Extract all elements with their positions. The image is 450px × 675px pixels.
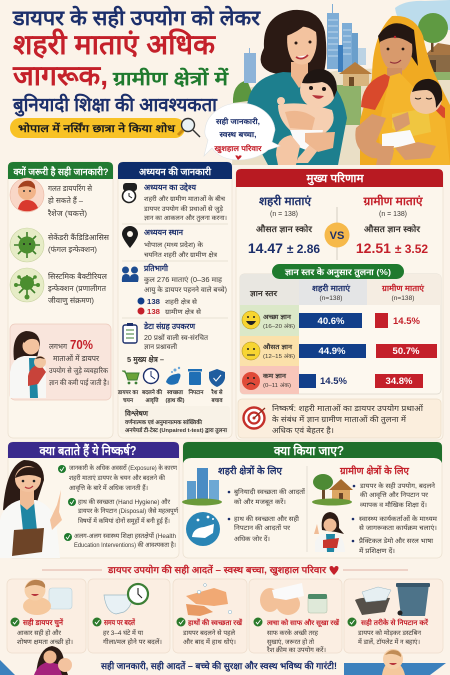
comparison table: ज्ञान स्तर — [249, 289, 278, 298]
text: rashes: गलत डायपरिंग से — [48, 184, 93, 193]
text: 70 percent: उपयोग से जुड़े व्यवहारिक — [49, 366, 108, 375]
text: objective: शहरी और ग्रामीण माताओं के बीच — [144, 195, 226, 203]
finding 2 — [68, 498, 179, 526]
icon: clipboard — [123, 323, 137, 343]
comparison pill heading: ज्ञान स्तर के अनुसार तुलना (%) — [284, 267, 391, 278]
icon: city — [182, 468, 222, 506]
text: area labels: स्वच्छता — [166, 390, 184, 396]
text: fungal infection: (फंगल इन्फेक्शन) — [48, 245, 97, 254]
row: low knowledge: (0–11 अंक) — [263, 382, 291, 389]
text: urban actions: बुनियादी स्वच्छता की आदतों — [234, 488, 305, 496]
title: जागरूक, — [12, 60, 108, 91]
finding 2: डायपर के निपटान (Disposal) जैसे महत्वपूर्ण — [77, 507, 179, 515]
text: area labels: डायपर का — [117, 390, 139, 396]
text: rural actions: से जागरूकता कार्यक्रम चलाएं। — [359, 524, 437, 532]
row: low knowledge: 14.5% — [320, 376, 347, 387]
comparison table — [240, 274, 441, 394]
text: analysis: अनपेयर्ड टी-टेस्ट (Unpaired t-test) द्वारा तुलना — [125, 426, 228, 434]
row: good knowledge: 14.5% — [393, 316, 420, 327]
card: proper disposal: डायपर को मोड़कर डस्टबिन — [357, 629, 421, 637]
icon: handwash — [186, 512, 220, 546]
icon: shield — [209, 369, 225, 387]
text: study location: भोपाल (मध्य प्रदेश) के — [144, 241, 204, 249]
row: good knowledge: (16–20 अंक) — [263, 323, 295, 330]
text: rural actions: व्यापक व मौखिक शिक्षा दें। — [360, 501, 427, 509]
icon: objective clock — [122, 183, 137, 202]
rural score — [356, 194, 428, 256]
text: 70 percent — [49, 338, 109, 387]
rural baby — [392, 108, 431, 138]
callout: speech bubble: सही जानकारी, — [215, 117, 260, 126]
finding 1: शहरी माताएं डायपर के चयन और बदलने की — [69, 474, 165, 482]
illustration: baby and diaper — [23, 580, 72, 615]
text: 70 percent: 70% — [70, 338, 93, 352]
text: bacterial infection — [48, 272, 108, 306]
card: hand hygiene — [173, 579, 247, 653]
panel heading: अध्ययन की जानकारी — [139, 166, 212, 178]
conclusion callout: के संबंध में ज्ञान ग्रामीण माताओं की तुलना में — [272, 415, 406, 425]
card: change on time: समय पर बदलें — [103, 618, 136, 627]
illustration: baby bottom and cream — [260, 583, 327, 615]
urban score: (n = 138) — [270, 211, 298, 218]
illustration: urban and rural mothers — [232, 0, 450, 165]
comparison table: (n=138) — [392, 295, 414, 302]
icon: fungus — [10, 228, 44, 262]
text: fungal infection — [48, 233, 110, 254]
panel heading: क्यों जरूरी है सही जानकारी? — [13, 166, 109, 178]
icon: magnifier — [178, 118, 200, 137]
conclusion callout: अधिक एवं बेहतर है। — [272, 426, 334, 435]
card: keep skin clean: सुखाएं, जरूरत हो तो — [267, 638, 314, 646]
VS badge — [324, 222, 350, 248]
card: proper disposal — [344, 579, 443, 653]
text: area labels: आवृत्ति — [146, 396, 160, 404]
text: rural actions: की आवृत्ति और निपटान पर — [360, 491, 428, 499]
urban mother — [247, 10, 347, 165]
card: hand hygiene: और बाद में हाथ धोएं। — [183, 638, 236, 646]
panel: study information — [117, 162, 232, 438]
panel heading: क्या किया जाए? — [273, 443, 344, 458]
text: participants: प्रतिभागी — [143, 263, 169, 273]
callout: speech bubble: खुशहाल परिवार — [213, 144, 263, 154]
card: change on time: गीला/मल होने पर बदलें। — [103, 638, 162, 646]
text: rural actions: प्रैक्टिकल डेमो और सरल भाषा — [359, 537, 433, 545]
icon: hand washing — [166, 367, 180, 385]
panel heading — [183, 442, 442, 463]
icon: location pin — [122, 226, 138, 248]
text: objective: डायपर उपयोग की प्रथाओं से जुड़े — [143, 205, 223, 213]
text: rural actions — [352, 482, 438, 555]
text: area labels — [117, 388, 223, 404]
title: शहरी माताएं अधिक — [13, 28, 217, 60]
text: data tool: 20 प्रश्नों वाली स्व-संरचित — [144, 333, 209, 342]
finding 2: हाथ की स्वच्छता (Hand Hygiene) और — [78, 498, 170, 506]
finding 3: अलग-अलग स्वास्थ्य शिक्षा हस्तक्षेपों (Health — [74, 532, 176, 540]
urban score: शहरी माताएं — [259, 194, 312, 208]
finding 2: विषयों में कमियां दोनों समूहों में बनी हुई हैं। — [78, 517, 170, 526]
panel heading — [236, 169, 443, 187]
card: right diaper — [7, 579, 86, 653]
text: data tool: ज्ञान प्रश्नावली — [144, 342, 177, 351]
text: rashes: रैशेज (चकत्ते) — [47, 209, 87, 218]
rural mother — [355, 16, 450, 165]
text: rural actions: स्वास्थ्य कार्यकर्ताओं के माध्यम — [359, 515, 438, 523]
card: keep skin clean: साफ करके अच्छी तरह — [267, 629, 318, 637]
panel heading: क्या बताते हैं ये निष्कर्ष? — [39, 443, 136, 458]
text: participants — [138, 263, 227, 316]
illustration: diaper and clock — [104, 584, 148, 614]
panel heading — [8, 162, 113, 179]
title: ग्रामीण क्षेत्रों में — [112, 67, 229, 90]
footer — [0, 646, 446, 675]
callout: speech bubble: स्वस्थ बच्चा, — [218, 130, 256, 139]
card: change on time — [88, 579, 170, 653]
text: urban actions — [228, 488, 305, 543]
icon: health worker — [314, 512, 345, 552]
text: 70 percent: ज्ञान की कमी पाई जाती है। — [49, 378, 109, 387]
icon: shopping cart — [122, 371, 139, 384]
heading: correct diaper habits — [42, 564, 408, 576]
card: right diaper: आकार सही हो और — [17, 629, 61, 637]
text: objective — [143, 182, 227, 222]
text: analysis — [120, 406, 230, 434]
text: analysis: वर्णनात्मक एवं अनुमानात्मक सांख्यिकी — [124, 418, 203, 426]
icon: baby rash — [10, 178, 44, 212]
text: rural actions: डायपर के सही उपयोग, बदलने — [359, 482, 435, 490]
comparison table: शहरी माताएं — [312, 283, 351, 293]
icon: tree and hut — [312, 474, 353, 506]
text: 70 percent: माताओं में डायपर — [53, 354, 100, 363]
icon: dustbin — [188, 369, 202, 385]
title — [12, 5, 261, 117]
row: average knowledge: 44.9% — [319, 346, 346, 357]
card: right diaper: शोषण क्षमता अच्छी हो। — [17, 638, 73, 646]
text: objective: अध्ययन का उद्देश्य — [144, 182, 196, 192]
urban score — [248, 194, 320, 256]
text: area labels: चयन — [122, 398, 134, 404]
icon: nurse with baby — [10, 331, 46, 398]
footer: सही जानकारी, सही आदतें – बच्चे की सुरक्षा और स्वस्थ भविष्य की गारंटी! — [100, 660, 337, 672]
text: area labels: बदलने की — [141, 388, 163, 396]
subheading: urban: शहरी क्षेत्रों के लिए — [218, 465, 283, 477]
row: average knowledge: औसत ज्ञान — [263, 343, 293, 351]
text: bacterial infection: जीवाणु संक्रमण) — [48, 296, 94, 306]
title: बुनियादी शिक्षा की आवश्यकता — [12, 93, 218, 117]
urban baby — [278, 103, 334, 135]
row: good knowledge — [240, 305, 420, 336]
text: 70 percent: लगभग — [49, 342, 68, 351]
rural score: 12.51 ± 3.52 — [356, 240, 428, 256]
row: average knowledge: 50.7% — [393, 346, 420, 357]
card: proper disposal: में डालें, टॉयलेट में न बहाएं। — [358, 638, 420, 646]
panel: what findings tell us — [0, 442, 179, 558]
row: average knowledge: (12–15 अंक) — [263, 353, 295, 360]
text: study location — [144, 228, 217, 259]
conclusion callout: निष्कर्ष: शहरी माताओं का डायपर उपयोग प्रथाओं — [272, 404, 424, 413]
text: participants: ग्रामीण क्षेत्र से — [165, 308, 202, 316]
panel: why correct information matters — [8, 162, 113, 438]
urban score: 14.47 ± 2.86 — [248, 240, 320, 256]
text: participants: 138 — [147, 309, 160, 316]
subtitle pill: भोपाल में नर्सिंग छात्रा ने किया शोध — [18, 122, 176, 135]
text: objective: ज्ञान का आकलन और तुलना करना। — [144, 214, 227, 222]
panel heading: मुख्य परिणाम — [305, 171, 364, 186]
VS badge: VS — [330, 230, 344, 242]
text: rashes — [47, 184, 93, 218]
card: hand hygiene: डायपर बदलने से पहले — [182, 629, 236, 637]
text: participants: आयु के डायपर पहनने वाले बच्चे) — [144, 285, 227, 294]
text: area labels: निपटान — [188, 388, 204, 396]
finding 3: Education Interventions) की आवश्यकता है। — [74, 541, 176, 549]
subtitle pill — [10, 118, 185, 138]
text: bacterial infection: इन्फेक्शन (प्रणालीगत — [48, 284, 107, 293]
text: participants: 138 — [147, 299, 160, 306]
callout: speech bubble — [204, 103, 280, 160]
subheading: rural: ग्रामीण क्षेत्रों के लिए — [339, 465, 410, 477]
card: keep skin clean: त्वचा को साफ और सूखा रखें — [266, 618, 340, 628]
panel heading — [8, 442, 179, 458]
card: proper disposal: सही तरीके से निपटान करें — [360, 618, 429, 627]
text: fungal infection: सेकेंडरी कैंडिडिआसिस — [48, 233, 110, 242]
icon: participants — [122, 266, 139, 282]
card: hand hygiene: हाथों की स्वच्छता रखें — [187, 618, 243, 627]
illustration: baby — [382, 649, 405, 675]
card: change on time: हर 3–4 घंटे में या — [103, 629, 143, 637]
text: rashes: हो सकते हैं – — [48, 196, 84, 205]
row: low knowledge: 34.8% — [386, 376, 413, 387]
row: low knowledge: कम ज्ञान — [262, 373, 287, 380]
conclusion callout — [238, 399, 441, 438]
panel heading — [118, 162, 232, 179]
illustration: doctor — [0, 460, 62, 558]
comparison table: ग्रामीण माताएं — [381, 283, 425, 293]
title: डायपर के सही उपयोग को लेकर — [12, 5, 261, 30]
row: good knowledge: अच्छा ज्ञान — [263, 314, 292, 321]
sky and background scenery — [232, 0, 450, 165]
icon: bacteria — [10, 268, 44, 302]
text: study location: चयनित शहरी और ग्रामीण क्षेत्र — [144, 251, 217, 259]
row: average knowledge — [240, 336, 437, 366]
heading: correct diaper habits: डायपर उपयोग की सही आदतें – स्वस्थ बच्चा, खुशहाल परिवार — [107, 564, 327, 576]
finding 1 — [58, 464, 177, 492]
row: low knowledge — [240, 366, 423, 394]
rural score: (n = 138) — [379, 211, 407, 218]
card: keep skin clean — [249, 579, 342, 654]
text: area labels: रैश से — [211, 388, 223, 396]
text: analysis: विश्लेषण — [124, 409, 149, 418]
rural score: ग्रामीण माताएं — [362, 194, 423, 208]
callout: 70 percent — [10, 324, 111, 400]
text: urban actions: को और मजबूत करें। — [234, 498, 286, 506]
panel: what should be done — [182, 442, 442, 558]
text: urban actions: हाथ की स्वच्छता और सही — [234, 515, 299, 523]
comparison pill heading — [272, 264, 404, 279]
text: participants: शहरी क्षेत्र से — [165, 298, 198, 306]
text: rural actions: में प्रशिक्षण दें। — [359, 547, 395, 555]
card: right diaper: सही डायपर चुनें — [22, 618, 64, 628]
text: area labels: (हाथ की) — [166, 396, 185, 404]
finding 3 — [64, 532, 176, 549]
panel: main results — [236, 169, 443, 440]
text: study location: अध्ययन स्थान — [144, 228, 184, 237]
comparison table: (n=138) — [320, 295, 342, 302]
rural score: औसत ज्ञान स्कोर — [364, 224, 421, 234]
text: data tool: डेटा संग्रह उपकरण — [143, 321, 196, 331]
finding 1: आवृत्ति के बारे में अधिक जानती हैं। — [69, 484, 148, 492]
illustration: bin and diaper — [355, 583, 430, 616]
text: area labels: बचाव — [211, 398, 223, 404]
icon: clock — [144, 368, 158, 384]
illustration: washing hands — [186, 584, 232, 616]
finding 1: जानकारी के अधिक अवसरों (Exposure) के कारण — [69, 464, 177, 472]
card: keep skin clean: रैश क्रीम का उपयोग करें। — [267, 646, 326, 654]
text: data tool — [143, 321, 209, 351]
text: urban actions: निपटान की आदतों पर — [234, 524, 290, 532]
urban score: औसत ज्ञान स्कोर — [256, 224, 313, 234]
text: five areas: 5 मुख्य क्षेत्र – — [127, 355, 164, 365]
text: participants: कुल 276 माताएं (0–36 माह — [144, 276, 222, 284]
row: good knowledge: 40.6% — [318, 316, 345, 327]
text: urban actions: अधिक जोर दें। — [234, 535, 270, 543]
text: bacterial infection: सिस्टमिक बैक्टीरियल — [48, 272, 108, 281]
illustration: mother and baby — [34, 646, 72, 675]
